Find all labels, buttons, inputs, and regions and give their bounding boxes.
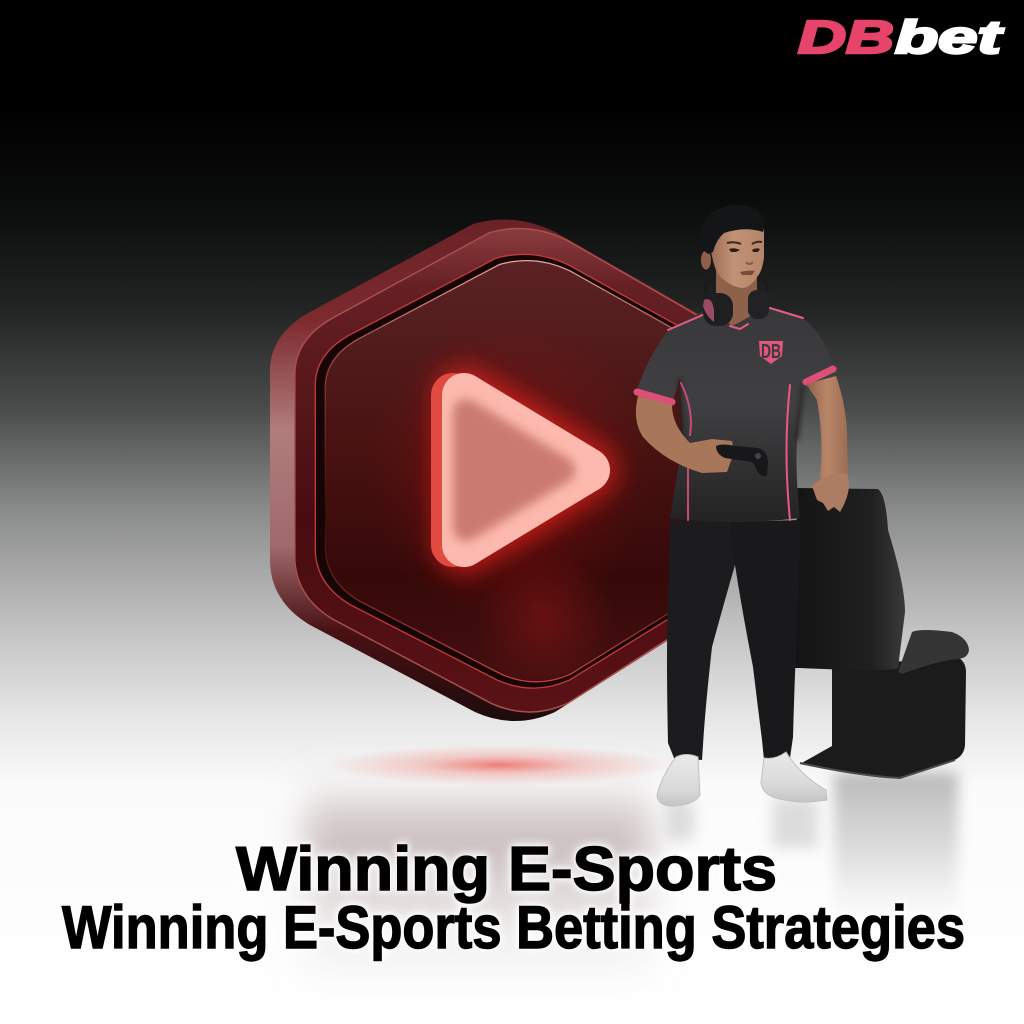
headphones <box>703 280 769 326</box>
hexagon face <box>325 261 721 682</box>
jersey <box>636 306 835 522</box>
hexagon front rim <box>295 229 735 712</box>
hair <box>701 205 764 254</box>
red floor glow <box>325 745 675 785</box>
game controller <box>716 444 768 476</box>
chair seat <box>898 630 969 674</box>
right trouser leg <box>730 520 800 760</box>
chair floor reflection <box>834 772 958 932</box>
chair back <box>795 488 905 670</box>
hexagon inner groove <box>314 254 677 689</box>
hexagon floor reflection <box>305 775 650 1000</box>
chair base <box>800 656 966 778</box>
logo DBbet <box>798 11 1004 63</box>
hexagon play badge <box>270 220 735 721</box>
jersey sleeve creases <box>680 378 803 440</box>
shoe floor reflections <box>666 798 818 848</box>
left shoe <box>657 754 700 806</box>
gaming chair <box>795 488 969 778</box>
neck <box>716 268 757 326</box>
ear <box>701 250 711 270</box>
play button extruded edge <box>431 373 459 567</box>
head <box>709 224 764 288</box>
left trouser leg <box>667 520 738 760</box>
logo DBbet: bet <box>895 11 1004 63</box>
face features <box>727 242 762 275</box>
face vertical sheen <box>488 564 602 680</box>
jersey pink trim <box>637 308 833 520</box>
player <box>636 205 849 806</box>
play button inner shade <box>466 412 562 528</box>
play button triangle <box>464 395 588 545</box>
logo DBbet: DB <box>798 11 894 63</box>
title <box>62 835 965 961</box>
jersey DB badge: DB <box>761 341 781 363</box>
right hand on chair <box>812 473 849 512</box>
face red halo <box>396 348 622 596</box>
chair base plate highlight <box>800 760 955 778</box>
left arm <box>636 396 734 473</box>
right arm <box>806 376 848 478</box>
hexagon side extrusion <box>270 220 730 721</box>
right shoe <box>761 752 827 802</box>
play button glow <box>464 395 588 545</box>
jersey DB badge <box>759 341 783 364</box>
title line 1: Winning E-Sports <box>236 835 777 904</box>
